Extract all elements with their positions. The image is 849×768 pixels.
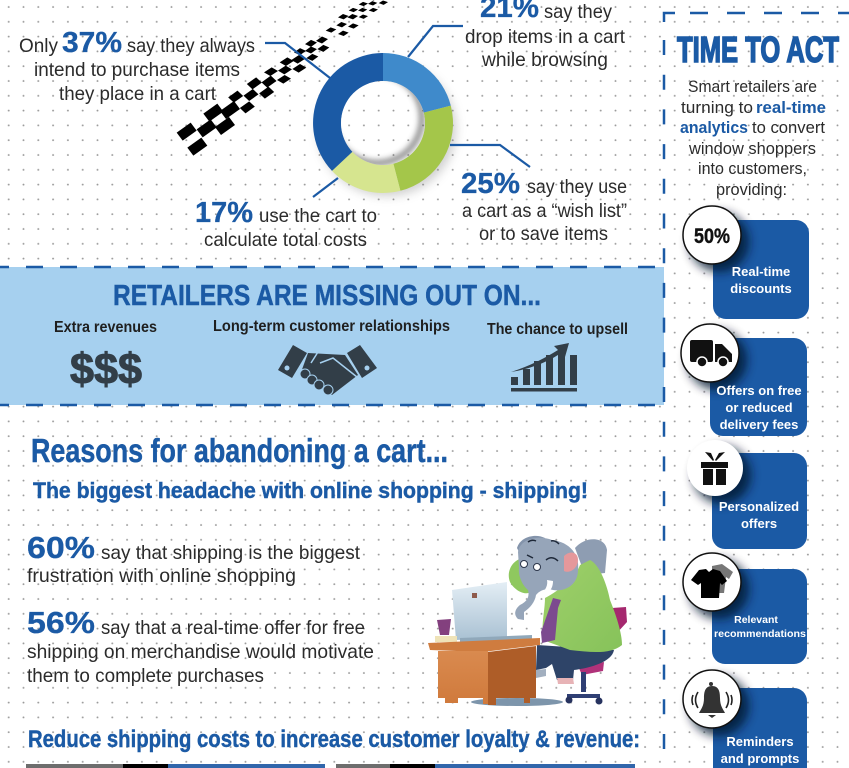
card text: Reminders	[726, 734, 794, 749]
card text	[716, 383, 802, 432]
stat: 56%: shipping on merchandise would motivate	[27, 641, 374, 663]
icon: bell	[692, 682, 732, 718]
card: relevant recommendations	[683, 553, 807, 664]
card text	[714, 614, 806, 640]
icon: shirts	[691, 564, 733, 598]
leader lines	[265, 26, 530, 197]
card text: and prompts	[721, 751, 799, 766]
stat: 56%	[27, 605, 374, 687]
table header bars	[26, 764, 635, 768]
card: reminders and prompts	[683, 670, 807, 768]
callout: 25%: say they use	[527, 176, 627, 198]
card: delivery fees	[681, 324, 807, 436]
eyes	[527, 540, 559, 561]
card text: delivery fees	[720, 417, 798, 432]
callout: 21%	[465, 0, 626, 71]
icon: truck	[690, 340, 732, 367]
stat: 56%: them to complete purchases	[27, 665, 264, 687]
donut chart	[313, 53, 456, 196]
icon: dollar signs: $$$	[70, 345, 142, 394]
heading: reduce shipping costs: Reduce shipping costs to increase customer loyalty & revenue:	[28, 726, 640, 753]
icon: 50%: 50%	[694, 225, 730, 248]
intro text: turning to	[681, 98, 753, 117]
segment: 25% wish list	[393, 106, 453, 191]
segment: 37% intend to purchase	[313, 53, 383, 171]
intro text: providing:	[716, 180, 787, 199]
label: extra revenues: Extra revenues	[54, 319, 157, 336]
intro text: to convert	[752, 118, 825, 137]
callout: 17%	[195, 197, 377, 251]
cup	[437, 619, 451, 635]
stat: 60%: frustration with online shopping	[27, 565, 296, 587]
subheading: shipping headache: The biggest headache with online shopping - shipping!	[33, 478, 588, 503]
callout: 17%: 17%	[195, 197, 253, 229]
callout: 21%: drop items in a cart	[465, 26, 626, 48]
tie	[541, 598, 561, 643]
card text	[719, 499, 799, 531]
laptop	[452, 582, 507, 640]
icon: growth chart	[511, 343, 577, 392]
callout: 37%: they place in a cart	[59, 83, 217, 105]
callout: 21%: say they	[544, 1, 612, 23]
card text: discounts	[730, 281, 792, 296]
chair	[612, 607, 627, 634]
card text: recommendations	[714, 628, 806, 640]
card: real-time discounts	[683, 206, 809, 319]
callout: 25%: a cart as a “wish list”	[462, 200, 627, 222]
callout: 17%: use the cart to	[259, 205, 377, 227]
label: upsell: The chance to upsell	[487, 321, 628, 338]
callout: 21%: while browsing	[481, 49, 608, 71]
card text	[721, 734, 799, 766]
panel: time to act frame	[664, 13, 849, 768]
intro text: real-time	[756, 98, 826, 117]
stat: 60%: 60%	[27, 530, 95, 565]
hand	[564, 553, 578, 572]
ears	[575, 539, 607, 575]
donut centre	[341, 81, 425, 165]
stat: 56%: 56%	[27, 605, 95, 640]
panel: retailers are missing out	[0, 267, 664, 405]
callout: 25%	[461, 168, 627, 245]
illustration: elephant at desk	[428, 536, 627, 706]
stat: 60%	[27, 530, 361, 587]
stat: 60%: say that shipping is the biggest	[101, 542, 361, 564]
checkered racing flag band	[177, 0, 388, 156]
callout: 25%: or to save items	[479, 223, 608, 245]
callout: 37%: say they always	[127, 35, 255, 57]
intro text	[680, 77, 826, 199]
intro text: Smart retailers are	[688, 77, 817, 96]
card text: Offers on free	[716, 383, 802, 398]
callout: 37%: intend to purchase items	[34, 59, 240, 81]
callout: 37%	[19, 27, 255, 105]
segment: 21% drop items	[383, 53, 451, 113]
callout: 37%: 37%	[62, 27, 122, 59]
intro text: window shoppers	[688, 139, 816, 158]
card text: Real-time	[732, 264, 790, 279]
callout: 25%: 25%	[461, 168, 520, 200]
heading: reasons for abandoning a cart: Reasons for abandoning a cart...	[31, 432, 448, 469]
trousers	[536, 645, 614, 680]
card text: offers	[741, 516, 777, 531]
icon: handshake	[278, 345, 377, 395]
heading: retailers: RETAILERS ARE MISSING OUT ON...	[113, 280, 541, 312]
left arm	[509, 558, 530, 593]
callout: 37%: Only	[19, 35, 58, 57]
card: personalized offers	[687, 440, 807, 549]
card text: or reduced	[725, 400, 793, 415]
green body	[542, 560, 622, 652]
card text: Personalized	[719, 499, 799, 514]
intro text: analytics	[680, 118, 748, 137]
callout: 17%: calculate total costs	[204, 229, 367, 251]
stat: 56%: say that a real-time offer for free	[101, 617, 365, 639]
tusk	[540, 580, 553, 595]
segment: 17% calculate costs	[332, 152, 400, 193]
desk	[428, 638, 540, 652]
card text	[730, 264, 792, 296]
intro text: into customers,	[698, 159, 807, 178]
card text: Relevant	[734, 614, 778, 626]
icon: gift	[701, 452, 728, 485]
glasses	[520, 560, 540, 570]
head	[515, 538, 578, 620]
label: relationships: Long-term customer relationships	[213, 318, 450, 335]
